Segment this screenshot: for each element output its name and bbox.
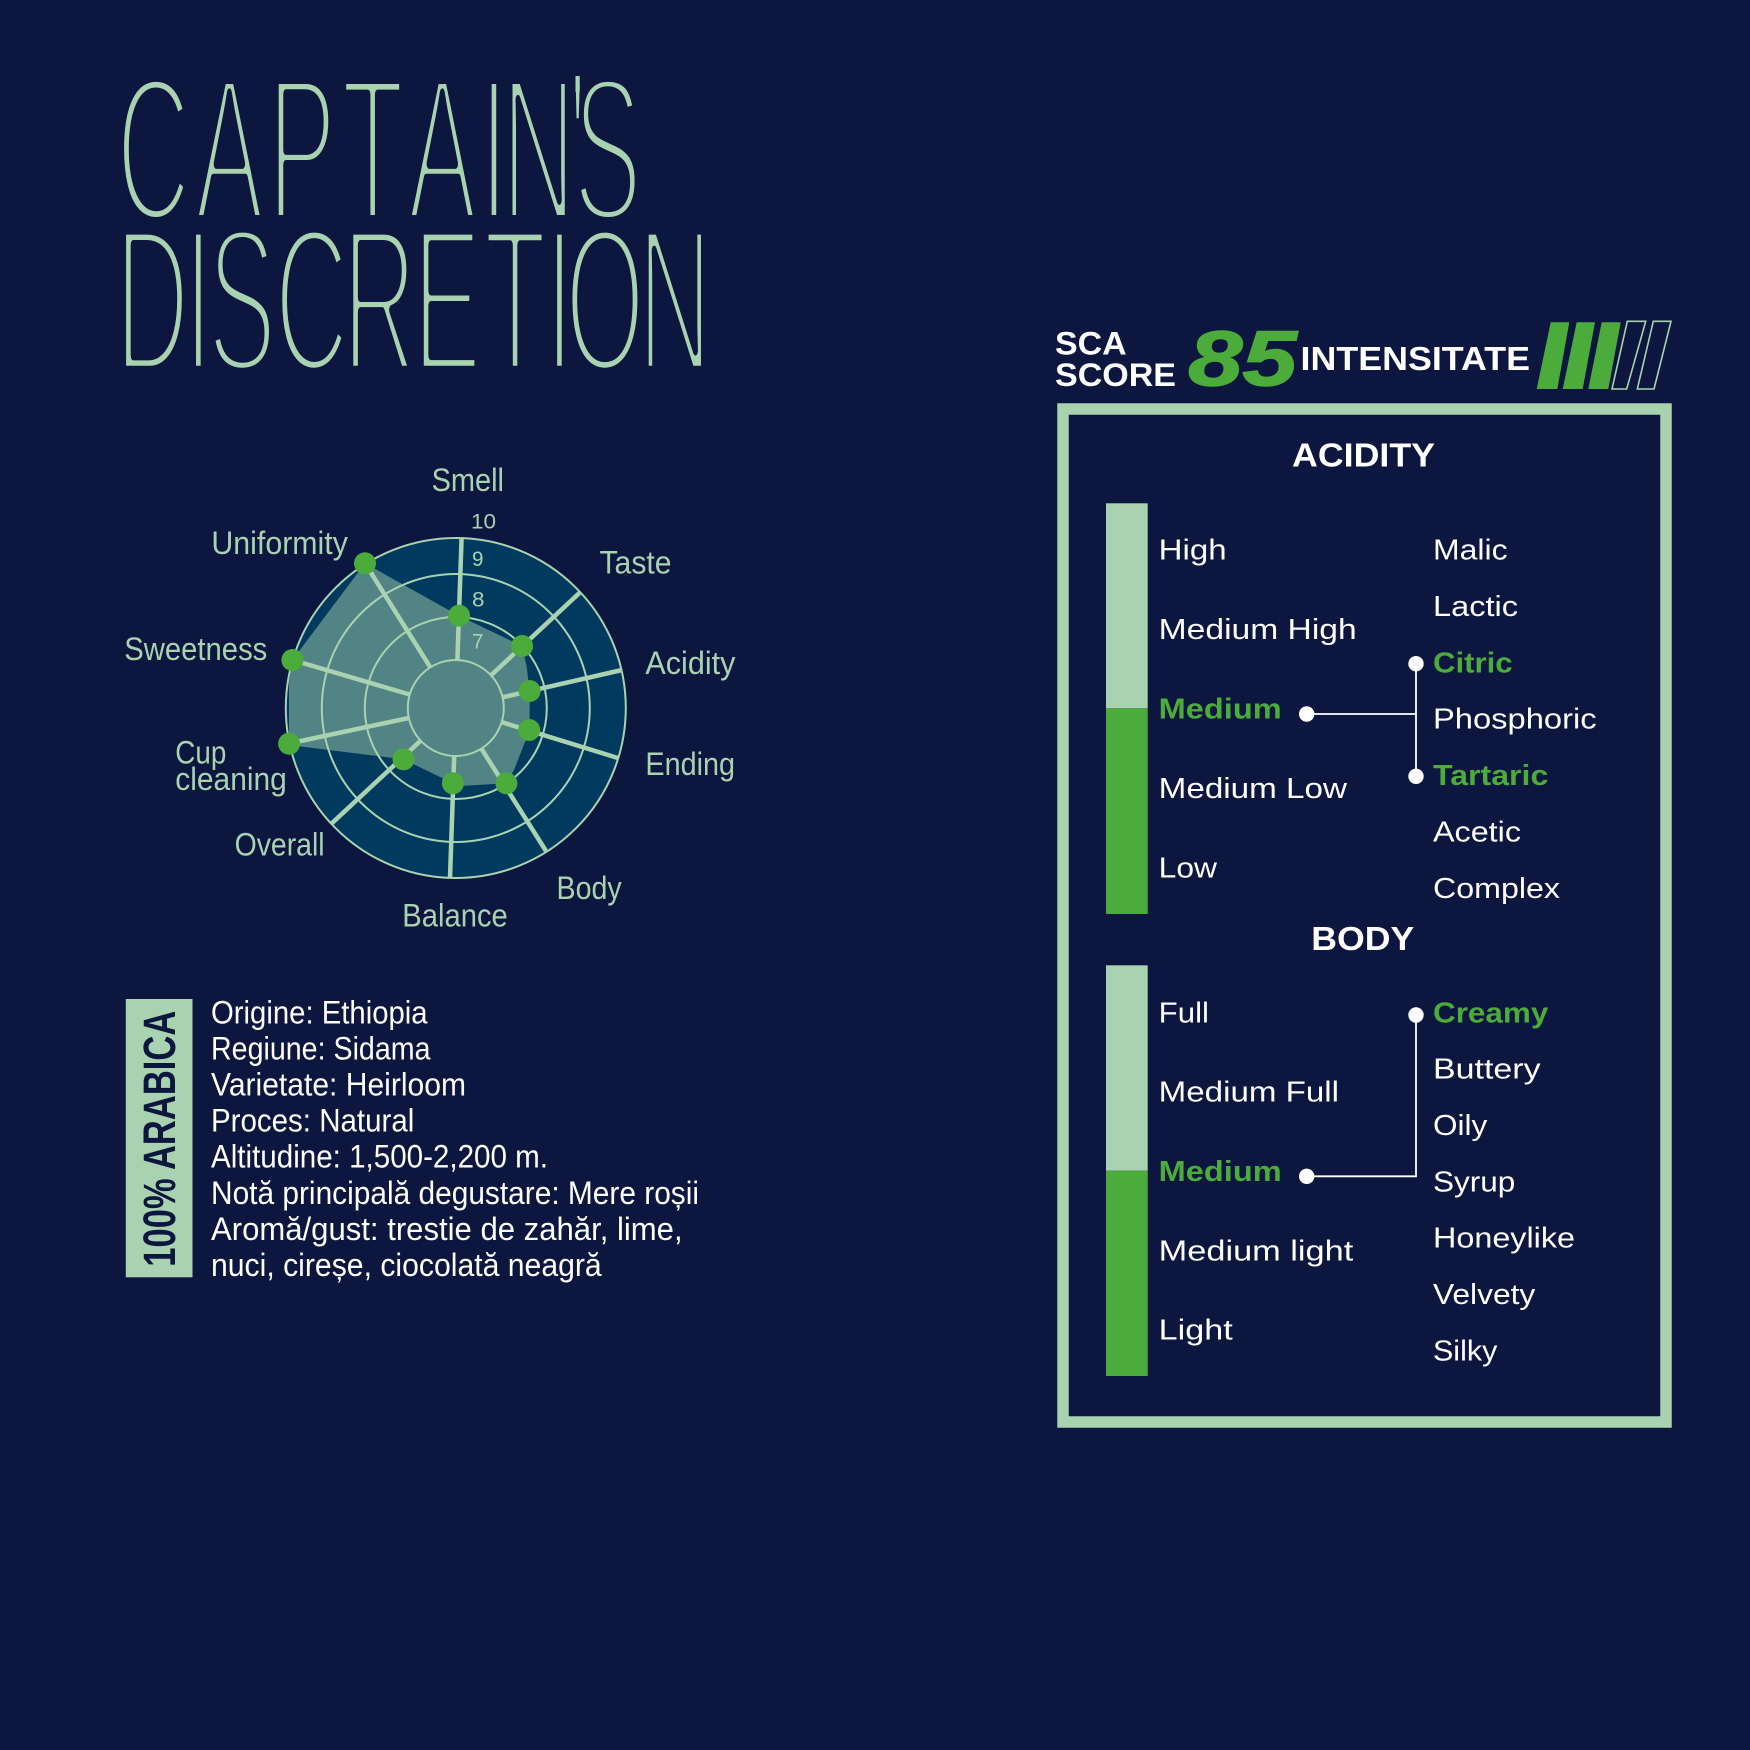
axis labels xyxy=(124,462,735,934)
body types: Creamy xyxy=(1433,997,1548,1029)
title: CAPTAIN'S xyxy=(116,35,642,264)
coffee details text xyxy=(211,994,699,1283)
coffee details text: Regiune: Sidama xyxy=(211,1030,431,1066)
body types: Velvety xyxy=(1433,1279,1536,1311)
body levels: Medium xyxy=(1159,1156,1282,1188)
acidity types: Acetic xyxy=(1433,816,1521,848)
acidity types: Tartaric xyxy=(1433,760,1548,792)
data points xyxy=(278,552,541,794)
acidity levels: Medium xyxy=(1159,693,1282,725)
score value: 85 xyxy=(1188,314,1299,402)
body types: Silky xyxy=(1433,1335,1498,1367)
coffee details text: Aromă/gust: trestie de zahăr, lime, xyxy=(211,1211,683,1247)
body types: Syrup xyxy=(1433,1166,1515,1198)
acidity types: Malic xyxy=(1433,534,1508,566)
coffee details text: Varietate: Heirloom xyxy=(211,1067,466,1103)
body levels: Light xyxy=(1159,1315,1233,1347)
intensity bars xyxy=(1537,321,1671,389)
SCA score xyxy=(1055,314,1299,402)
heading: acidity: ACIDITY xyxy=(1292,437,1435,474)
axis labels: cleaning xyxy=(175,761,287,797)
radar chart xyxy=(124,462,735,934)
acidity types: Lactic xyxy=(1433,591,1518,623)
axis labels: Uniformity xyxy=(211,525,348,561)
acidity scale bar xyxy=(1106,503,1148,914)
acidity levels xyxy=(1159,534,1357,884)
body types: Honeylike xyxy=(1433,1223,1575,1255)
axis labels: Taste xyxy=(600,544,672,580)
axis labels: Cup xyxy=(175,734,226,770)
acidity types: Citric xyxy=(1433,647,1513,679)
axis labels: Balance xyxy=(402,898,508,934)
title xyxy=(115,35,712,415)
scale ticks: 7 xyxy=(472,630,484,653)
body types: Buttery xyxy=(1433,1054,1541,1086)
SCA score: SCA xyxy=(1055,325,1127,361)
acidity levels: Medium Low xyxy=(1159,773,1348,805)
acidity levels: High xyxy=(1159,534,1227,566)
axis labels: Ending xyxy=(645,746,735,782)
scale ticks xyxy=(471,510,496,653)
acidity connector xyxy=(1299,656,1424,784)
data polygon xyxy=(289,563,530,786)
coffee details text: nuci, cireșe, ciocolată neagră xyxy=(211,1247,602,1283)
axis labels: Overall xyxy=(235,827,325,863)
coffee details text: Notă principală degustare: Mere roșii xyxy=(211,1175,699,1211)
acidity levels: Medium High xyxy=(1159,614,1357,646)
title: DISCRETION xyxy=(115,186,712,415)
acidity levels: Low xyxy=(1159,852,1218,884)
acidity types xyxy=(1433,534,1597,905)
body types: Oily xyxy=(1433,1110,1488,1142)
coffee details text: Origine: Ethiopia xyxy=(211,994,428,1030)
body levels xyxy=(1159,997,1353,1347)
coffee details text: Proces: Natural xyxy=(211,1103,414,1139)
body connector xyxy=(1299,1007,1424,1184)
coffee details text: Altitudine: 1,500-2,200 m. xyxy=(211,1139,548,1175)
SCA score: SCORE xyxy=(1055,357,1176,393)
scale ticks: 10 xyxy=(471,510,496,533)
acidity types: Phosphoric xyxy=(1433,704,1597,736)
badge: 100% arabica: 100% ARABICA xyxy=(134,1011,185,1267)
axis labels: Smell xyxy=(432,462,504,498)
acidity types: Complex xyxy=(1433,873,1561,905)
body levels: Medium light xyxy=(1159,1235,1353,1267)
body levels: Medium Full xyxy=(1159,1077,1339,1109)
body levels: Full xyxy=(1159,997,1209,1029)
body types xyxy=(1433,997,1575,1367)
intensity label: INTENSITATE xyxy=(1300,340,1530,377)
panel: acidity and body xyxy=(1063,409,1666,1422)
axis labels: Sweetness xyxy=(124,631,267,667)
badge: 100% arabica xyxy=(126,999,192,1277)
scale ticks: 9 xyxy=(472,548,484,571)
scale ticks: 8 xyxy=(472,589,484,612)
axis labels: Body xyxy=(556,870,622,906)
axis labels: Acidity xyxy=(645,645,735,681)
heading: body: BODY xyxy=(1311,920,1414,957)
body scale bar xyxy=(1106,965,1148,1376)
